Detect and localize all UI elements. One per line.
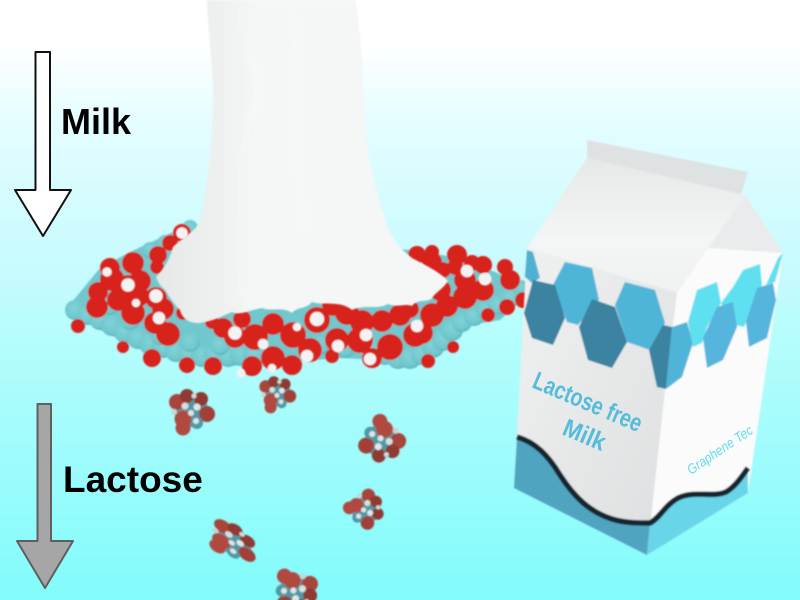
carton text: Lactose free: Lactose free xyxy=(529,367,646,438)
column texture xyxy=(239,10,305,300)
lactose molecule 1 xyxy=(169,389,215,436)
graphene rim spheres xyxy=(65,220,529,369)
hydrogen atoms xyxy=(102,227,492,378)
hexagon band xyxy=(524,250,783,389)
carton top seam xyxy=(587,140,748,195)
carton side face xyxy=(647,248,783,555)
graphene base xyxy=(65,220,529,369)
lactose molecule 5 xyxy=(200,513,266,573)
carton text: Graphene Tec: Graphene Tec xyxy=(684,422,756,477)
carton wave line xyxy=(517,437,748,523)
label: Lactose: Lactose xyxy=(63,459,203,500)
arrow: lactose flow xyxy=(17,404,73,588)
carton front face xyxy=(514,248,677,555)
oxygen atoms xyxy=(72,225,530,375)
lactose molecules xyxy=(169,376,412,600)
carton roof xyxy=(527,158,745,293)
foreground molecules on sheet xyxy=(102,227,492,378)
lactose molecule 4 xyxy=(339,485,390,536)
lactose molecule 6 xyxy=(262,560,325,600)
lactose molecule 2 xyxy=(259,376,296,413)
carton bottom wave: front xyxy=(514,437,650,555)
milk column xyxy=(156,0,448,323)
milk carton xyxy=(514,140,783,555)
label: Milk: Milk xyxy=(61,101,132,142)
carton text: Milk: Milk xyxy=(559,414,610,457)
carton gable xyxy=(677,195,783,293)
arrow: milk flow xyxy=(15,52,71,236)
carton bottom wave: side xyxy=(647,468,748,555)
lactose molecule 3 xyxy=(348,408,412,471)
graphene sheet with molecules xyxy=(65,220,530,375)
